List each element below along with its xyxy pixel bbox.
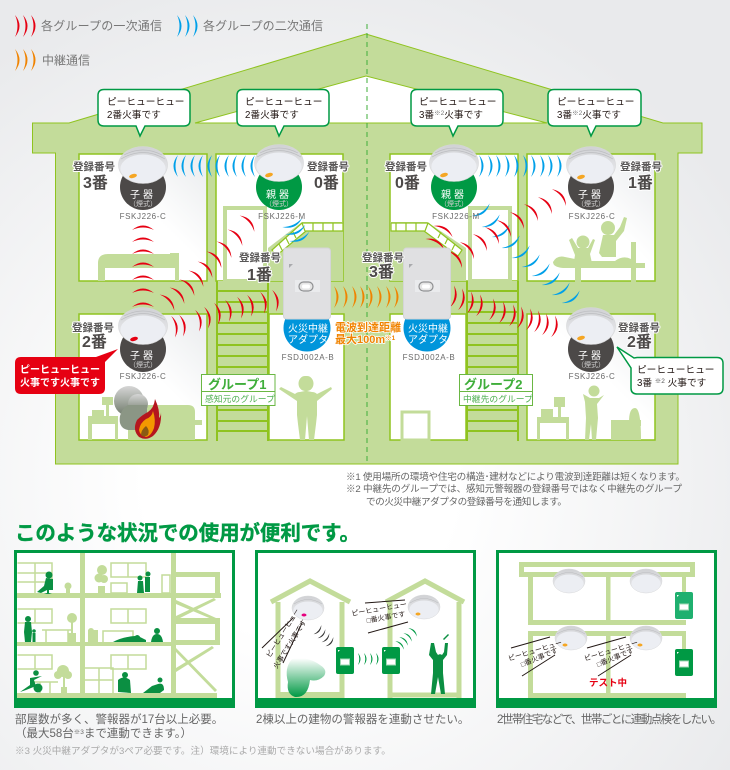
detector: child 2 left: 子器 <box>130 350 156 362</box>
speech bubble: lower right: 火事です <box>665 376 706 389</box>
call text B <box>583 637 639 676</box>
detector: master 0 right: FSKJ226-M <box>432 212 480 221</box>
adapter right <box>382 647 400 674</box>
adapter: left <box>282 248 334 362</box>
registration labels: 登録番号 <box>307 160 349 173</box>
detector: master 0 left: 親器 <box>266 189 292 201</box>
detector: child 3: 子器 <box>130 189 156 201</box>
caption 1: ※3 <box>74 729 84 736</box>
distance text: ※1 <box>385 335 396 342</box>
detector: master 0 right <box>430 144 480 221</box>
door <box>402 412 429 440</box>
building frame <box>17 553 221 698</box>
smoke and fire <box>114 386 161 439</box>
detector: child 2 left: （煙式） <box>129 360 157 369</box>
registration labels: 登録番号 <box>72 321 114 334</box>
room: upper B <box>216 154 343 281</box>
speech bubble: lower right: ※2 <box>655 378 665 385</box>
speech bubble 4: 火事です <box>582 108 621 121</box>
caption 1 <box>15 712 223 740</box>
footnotes: ※2 中継先のグループでは、感知元警報器の登録番号ではなく中継先のグループ <box>346 483 682 495</box>
registration labels: 1番 <box>247 266 272 284</box>
alarm right <box>408 595 440 619</box>
legend: primary communication: 各グループの一次通信 <box>41 18 162 33</box>
green waves <box>358 626 419 665</box>
group 2 label <box>460 374 533 406</box>
registration labels: 3番 <box>369 263 394 281</box>
call text B: ピーヒューヒュー <box>583 639 639 663</box>
smoke <box>287 658 325 697</box>
waves: orange relay <box>334 286 398 308</box>
footnotes: での火災中継アダプタの登録番号を通知します。 <box>366 496 567 508</box>
windows and furniture <box>18 563 170 693</box>
rotated call text right: □番火事です <box>366 609 406 625</box>
furniture: sofa <box>128 405 202 440</box>
plants <box>54 565 108 693</box>
adapter: left: アダプタ <box>288 333 328 346</box>
silhouette: man waving <box>429 634 449 694</box>
speech bubble: red alarm <box>15 349 118 394</box>
alarm left <box>292 596 324 620</box>
caption 1: （最大58台 <box>15 728 74 740</box>
distance text: 最大100m <box>335 334 385 346</box>
caption 1: 部屋数が多く、警報器が17台以上必要。 <box>15 712 223 726</box>
detector: child 2 right <box>566 308 616 381</box>
adapter: right <box>403 248 455 362</box>
registration labels: 2番 <box>627 333 652 351</box>
detector: child 1: FSKJ226-C <box>569 212 615 221</box>
rotated call text left: ピーヒューヒュー <box>265 607 301 659</box>
footnotes: ※1 使用場所の環境や住宅の構造･建材などにより電波到達距離は短くなります。 <box>346 471 685 483</box>
silhouettes: residents <box>20 572 164 693</box>
detector: child 2 left: FSKJ226-C <box>120 372 166 381</box>
alarms <box>553 569 662 650</box>
house <box>32 34 702 464</box>
legend: secondary communication: 各グループの二次通信 <box>203 18 323 33</box>
speech bubble 3: ※2 <box>434 110 445 117</box>
right stairs and door <box>390 208 519 441</box>
waves: red diagonal right <box>425 186 569 268</box>
group 1 label <box>202 374 275 406</box>
frame <box>519 562 695 698</box>
house body <box>32 34 702 464</box>
left floor <box>278 692 342 698</box>
rotated call text left: 火事です火事です <box>271 618 308 670</box>
group 1 label: 感知元のグループ <box>205 393 275 404</box>
call text A: ピーヒューヒュー <box>507 639 563 663</box>
detector: child 2 right: 子器 <box>578 350 604 362</box>
rotated call text left <box>262 607 308 670</box>
speech bubble 2: ピーヒューヒュー <box>245 96 322 108</box>
silhouette: man <box>279 376 332 440</box>
detector: child 2 left <box>118 308 168 381</box>
group 1 label: グループ1 <box>208 377 266 392</box>
registration labels: 登録番号 <box>618 321 660 334</box>
waves: blue diagonal right <box>472 203 582 307</box>
group 2 label: 中継先のグループ <box>463 393 533 404</box>
footnotes <box>346 471 685 508</box>
detector: master 0 left: （煙式） <box>265 199 293 208</box>
speech bubble 1 <box>98 90 190 136</box>
detector: master 0 left <box>254 144 306 221</box>
legend: secondary communication <box>177 15 323 37</box>
waves: blue top right <box>479 155 562 177</box>
speech bubble: red alarm: 火事です火事です <box>20 376 100 389</box>
distance text <box>335 320 401 346</box>
panel base <box>255 698 476 708</box>
adapters <box>675 592 693 676</box>
room: lower left C <box>79 314 207 440</box>
panel: two buildings <box>255 552 476 708</box>
room: upper left A <box>79 154 207 281</box>
detector: master 0 left: FSKJ226-M <box>258 212 306 221</box>
speech bubble 1: 2番火事です <box>107 108 161 121</box>
caption 1: まで連動できます。） <box>84 726 192 740</box>
speech bubble: lower right <box>617 347 723 394</box>
silhouette: woman and desk <box>537 386 641 440</box>
adapter: right: 火災中継 <box>408 322 448 335</box>
speech bubble: lower right: ピーヒューヒュー <box>637 364 714 376</box>
speech bubble 3: 3番 <box>419 110 434 121</box>
test label: テスト中 <box>589 677 627 689</box>
registration labels: 登録番号 <box>239 251 281 264</box>
legend <box>15 15 323 71</box>
adapter: left: FSDJ002A-B <box>282 353 334 362</box>
detector: child 3: （煙式） <box>129 199 157 208</box>
speech bubble 4 <box>548 90 641 136</box>
detector: master 0 right: （煙式） <box>440 199 468 208</box>
silhouette: people on sofa <box>553 217 645 282</box>
registration labels: 登録番号 <box>73 160 115 173</box>
registration labels <box>72 160 662 351</box>
left stairs and door <box>216 208 343 441</box>
attic <box>195 76 547 123</box>
detector: child 1 <box>566 146 616 221</box>
rotated call text right: ピーヒューヒュー <box>351 600 407 618</box>
adapter: right: FSDJ002A-B <box>403 353 455 362</box>
registration labels: 3番 <box>83 174 108 192</box>
speech bubble 3 <box>411 90 503 136</box>
group 2 label: グループ2 <box>464 377 522 392</box>
detector: child 2 right: FSKJ226-C <box>569 372 615 381</box>
note: ※3 火災中継アダプタが3ペア必要です。注）環境により連動できない場合があります。 <box>15 745 391 757</box>
panel base <box>14 698 235 708</box>
speech bubble: red alarm: ピーヒューヒュー <box>20 364 100 376</box>
registration labels: 0番 <box>314 174 339 192</box>
speech bubble 2 <box>237 90 329 136</box>
legend: primary communication <box>15 15 162 37</box>
waves: blue top left <box>174 155 255 177</box>
speech bubble: lower right: 3番 <box>637 378 652 389</box>
call text A: □番火事です <box>519 646 559 669</box>
speech bubble 4: ピーヒューヒュー <box>557 96 634 108</box>
detector: child 3 <box>118 146 168 221</box>
detector: master 0 right: 親器 <box>441 189 467 201</box>
room: lower G <box>390 314 466 440</box>
room: upper E <box>390 154 518 281</box>
rotated call text right <box>351 600 408 633</box>
waves: blue near left master <box>282 218 311 245</box>
registration labels: 登録番号 <box>620 160 662 173</box>
speech bubble 4: ※2 <box>572 110 583 117</box>
house left <box>271 581 350 698</box>
speech bubble 2: 2番火事です <box>245 108 299 121</box>
speech bubble 3: ピーヒューヒュー <box>419 96 496 108</box>
speech bubble 1: ピーヒューヒュー <box>107 96 184 108</box>
registration labels: 登録番号 <box>362 251 404 264</box>
detector: child 2 right: （煙式） <box>577 360 605 369</box>
furniture: bed <box>98 253 179 281</box>
waves: red from right adapter <box>450 285 559 338</box>
adapter left <box>336 647 354 674</box>
detector: child 3: FSKJ226-C <box>120 212 166 221</box>
adapter: left: 火災中継 <box>288 322 328 335</box>
waves: red diagonal left <box>160 212 258 311</box>
call text A <box>507 637 563 676</box>
black waves <box>314 625 335 648</box>
call text B: □番火事です <box>595 646 635 669</box>
house right <box>386 581 464 698</box>
speech bubble 4: 3番 <box>557 110 572 121</box>
section title: このような状況での使用が便利です。 <box>15 521 360 545</box>
legend: relay communication <box>15 49 90 71</box>
speech bubble 3: 火事です <box>444 108 483 121</box>
dashed centre line <box>366 24 368 464</box>
caption 3: 2世帯住宅などで、世帯ごとに連動点検をしたい。 <box>497 712 722 726</box>
registration labels: 登録番号 <box>385 160 427 173</box>
room: lower D <box>269 314 344 440</box>
room: lower right H <box>527 314 655 440</box>
furniture: dresser and lamp <box>88 397 118 440</box>
registration labels: 0番 <box>395 174 420 192</box>
legend: relay communication: 中継通信 <box>42 52 90 68</box>
panel: many rooms <box>14 552 235 708</box>
room: upper right F <box>527 154 655 281</box>
detector: child 1: （煙式） <box>577 199 605 208</box>
waves: red vertical left <box>132 226 154 307</box>
adapter: right: アダプタ <box>408 333 448 346</box>
panel: two-household house <box>496 552 717 708</box>
detector: child 1: 子器 <box>578 189 604 201</box>
panel base <box>496 698 717 708</box>
waves: red to left adapter <box>171 289 280 338</box>
caption 2: 2棟以上の建物の警報器を連動させたい。 <box>256 712 469 726</box>
distance text: 電波到達距離 <box>335 320 401 334</box>
registration labels: 1番 <box>628 174 653 192</box>
registration labels: 2番 <box>82 333 107 351</box>
